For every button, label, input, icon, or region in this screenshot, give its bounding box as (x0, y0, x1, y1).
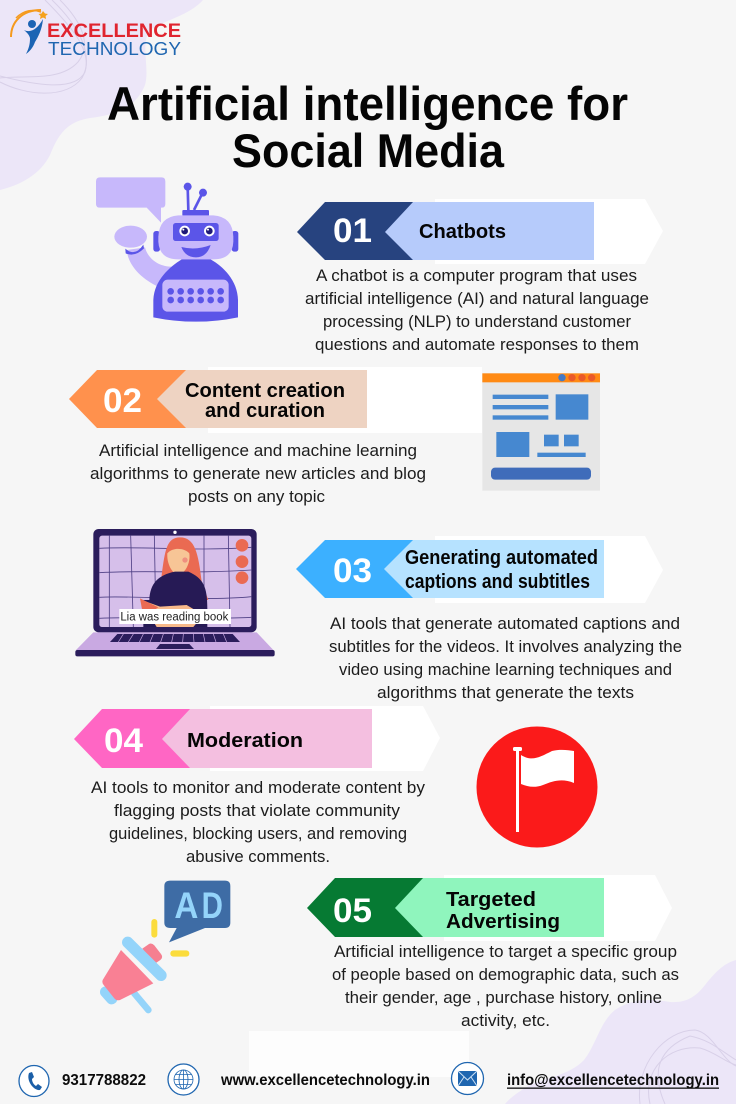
description 01 (305, 267, 649, 354)
banner 02: Content creation (185, 380, 345, 402)
banner 05 (307, 875, 672, 941)
title: Artificial intelligence for (107, 77, 628, 130)
banner 02 (69, 367, 482, 433)
banner 03 (296, 536, 663, 603)
white patch above footer (249, 1031, 469, 1077)
description 03: algorithms that generate the texts (377, 684, 634, 702)
description 04: flagging posts that violate community (114, 802, 401, 820)
banner 05: 05 (333, 892, 372, 930)
banner 05: Advertising (446, 911, 560, 933)
logo: Excellence Technology (11, 10, 181, 59)
description 05: Artificial intelligence to target a specific group (334, 943, 677, 961)
banner 03: captions and subtitles (405, 571, 590, 593)
description 04 (91, 779, 426, 866)
description 05: their gender, age , purchase history, online (345, 989, 662, 1007)
description 02 (90, 442, 426, 506)
banner 01 (297, 199, 663, 264)
banner 04: Moderation (187, 730, 303, 752)
icon: megaphone with AD speech bubble (102, 881, 230, 1010)
icon: laptop with video captions (75, 529, 275, 656)
icon: web page layout (482, 373, 600, 491)
description 03: subtitles for the videos. It involves analyzing the (329, 638, 682, 656)
banner 02: and curation (205, 400, 325, 422)
icon: red flag (476, 726, 598, 848)
description 04: AI tools to monitor and moderate content by (91, 779, 426, 797)
description 05: activity, etc. (461, 1012, 550, 1030)
step 03: Generating automated captions and subtitles (296, 536, 682, 702)
logo: Excellence Technology: TECHNOLOGY (48, 39, 181, 59)
description 04: abusive comments. (186, 848, 330, 866)
description 05: of people based on demographic data, such as (332, 966, 679, 984)
title (107, 77, 628, 177)
description 02: posts on any topic (188, 488, 325, 506)
phone number: 9317788822 (62, 1072, 146, 1089)
description 02: Artificial intelligence and machine learning (99, 442, 417, 460)
banner 02: 02 (103, 382, 142, 420)
banner 03: Generating automated (405, 547, 598, 569)
description 03: AI tools that generate automated captions and (330, 615, 680, 633)
description 03: video using machine learning techniques and (339, 661, 672, 679)
banner 05: Targeted (446, 889, 536, 911)
description 01: artificial intelligence (AI) and natural language (305, 290, 649, 308)
footer contact bar (19, 1062, 719, 1096)
description 01: questions and automate responses to them (315, 336, 639, 354)
title: Social Media (232, 124, 505, 177)
banner 04: 04 (104, 722, 143, 760)
description 03 (329, 615, 682, 702)
icon: chatbot robot (96, 177, 238, 322)
step 04: Moderation (74, 706, 440, 866)
step 01: Chatbots (297, 199, 663, 354)
background blob: bottom right (505, 960, 736, 1104)
banner 04 (74, 706, 440, 771)
banner 03: 03 (333, 552, 372, 590)
website: www.excellencetechnology.in (220, 1072, 430, 1089)
icon: globe (168, 1064, 199, 1095)
banner 01: Chatbots (419, 221, 506, 243)
description 01: processing (NLP) to understand customer (323, 313, 631, 331)
caption overlay: Lia was reading book (120, 610, 229, 624)
logo icon (11, 10, 48, 54)
background blob: top left (0, 0, 203, 190)
icon: phone (19, 1066, 49, 1096)
logo wordmark: EXCELLENCE (47, 20, 181, 42)
icon: megaphone with AD speech bubble: A (174, 884, 198, 926)
description 04: guidelines, blocking users, and removing (109, 825, 407, 843)
description 02: algorithms to generate new articles and blog (90, 465, 426, 483)
step 02: Content creation and curation (69, 367, 482, 506)
description 05 (332, 943, 679, 1030)
step 05: Targeted Advertising (307, 875, 679, 1030)
description 01: A chatbot is a computer program that uses (316, 267, 637, 285)
banner 01: 01 (333, 212, 372, 250)
email: info@excellencetechnology.in (507, 1072, 719, 1089)
icon: megaphone with AD speech bubble: D (202, 884, 223, 926)
icon: mail (452, 1062, 484, 1094)
